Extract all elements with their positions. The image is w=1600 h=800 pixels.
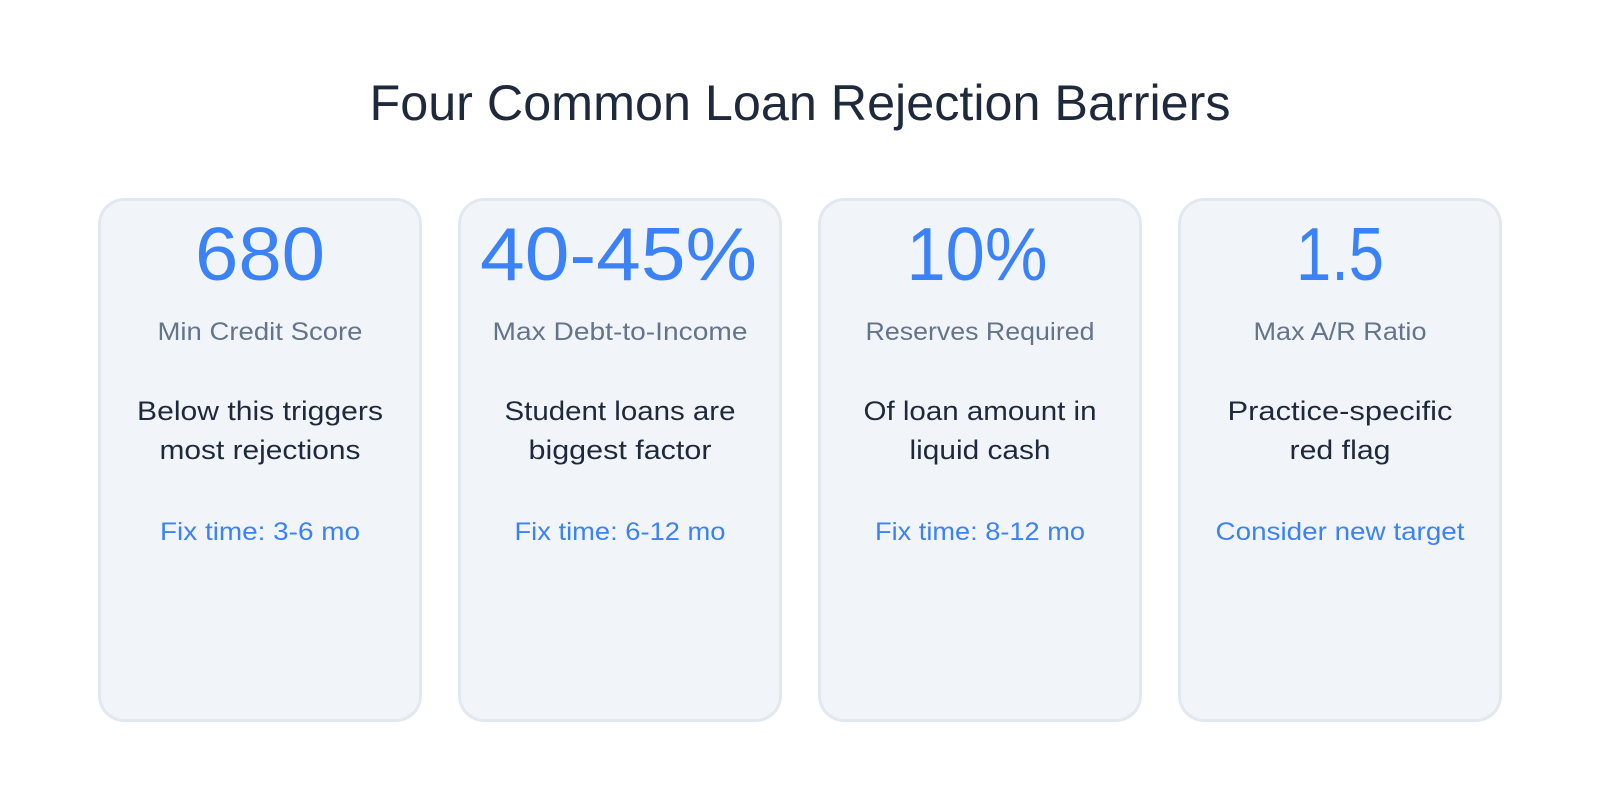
description: A/R ratio (1228, 396, 1452, 465)
panel: reserves (820, 200, 1140, 720)
panel: debt to income (460, 200, 780, 720)
advice: A/R ratio: Consider new target (1216, 518, 1465, 546)
description: A/R ratio: red flag (1290, 435, 1390, 465)
fix time: credit score: Fix time: 3-6 mo (160, 518, 360, 546)
description: reserves (864, 396, 1096, 465)
panel: credit score (100, 200, 420, 720)
stat: 1.5: 1.5 (1296, 212, 1384, 296)
stat: 40-45%: 40-45% (480, 212, 757, 296)
description: credit score (137, 396, 383, 465)
label: reserves required: Reserves Required (866, 318, 1094, 346)
description: A/R ratio: Practice-specific (1228, 396, 1452, 426)
description: credit score: most rejections (160, 435, 360, 465)
description: debt to income: Student loans are (504, 396, 736, 426)
label: max debt to income: Max Debt-to-Income (492, 318, 748, 346)
label: min credit score: Min Credit Score (158, 318, 362, 346)
description: reserves: Of loan amount in (864, 396, 1096, 426)
panel: A/R ratio (1180, 200, 1500, 720)
description: reserves: liquid cash (910, 435, 1050, 465)
stat: 10%: 10% (906, 212, 1048, 296)
label: max A/R ratio: Max A/R Ratio (1254, 318, 1426, 346)
description: credit score: Below this triggers (137, 396, 383, 426)
description: debt to income (504, 396, 736, 465)
fix time: debt to income: Fix time: 6-12 mo (514, 518, 726, 546)
title: Four Common Loan Rejection Barriers (370, 75, 1230, 131)
fix time: reserves: Fix time: 8-12 mo (875, 518, 1085, 546)
description: debt to income: biggest factor (528, 435, 712, 465)
stat: 680: 680 (195, 212, 325, 296)
